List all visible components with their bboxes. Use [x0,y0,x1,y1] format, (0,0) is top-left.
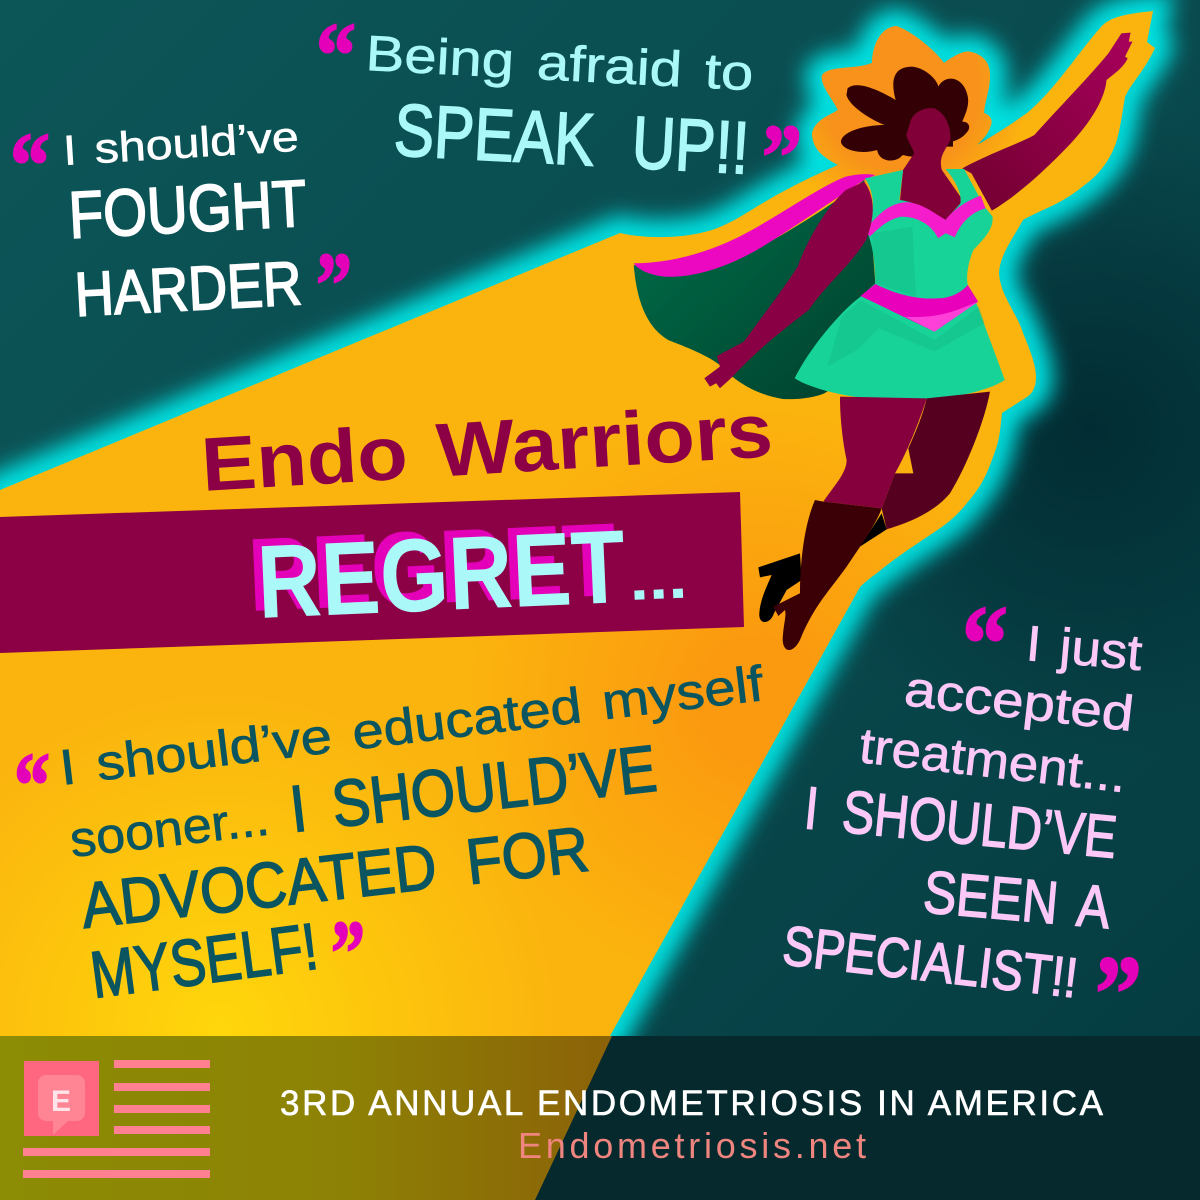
dress [795,169,1005,400]
neckline [865,196,986,238]
quote: fought harder: FOUGHT [67,166,308,252]
quote: being afraid to speak up: SPEAK UP!! [392,88,751,190]
regret shadow: REGRET [246,502,619,634]
quote: fought harder: ” [316,234,352,336]
footer site name: Endometriosis.net [518,1125,866,1166]
figure: upper body [634,33,1132,400]
quote: educated and advocated: I should’ve educated myself [57,655,766,796]
quote: seen a specialist [780,585,1145,1054]
quote: being afraid to speak up: ” [762,106,802,208]
quote: seen a specialist: treatment... [857,717,1129,803]
logo: endometriosis.net flag: E [51,1085,71,1118]
raised arm [962,33,1132,211]
lowered arm [704,182,873,388]
quote: educated and advocated: sooner... [67,790,272,868]
quote: fought harder: I should’ve [62,113,300,174]
quote: seen a specialist: “ [962,585,1008,704]
footer band [0,1036,1200,1200]
quote: fought harder [10,113,352,336]
footer title: 3RD ANNUAL ENDOMETRIOSIS IN AMERICA [280,1084,1104,1123]
quote: seen a specialist: SPECIALIST!! [780,913,1081,1009]
superhero figure [634,33,1132,650]
quote: educated and advocated: MYSELF! [86,909,322,1012]
quote: seen a specialist: accepted [902,660,1137,742]
belt tip [905,302,978,332]
quote: educated and advocated [14,655,766,1012]
quote: educated and advocated: I SHOULD’VE [286,731,660,846]
hair [841,67,969,161]
belt [860,284,978,332]
quote: being afraid to speak up [316,4,802,208]
logo: endometriosis.net flag [23,1060,210,1178]
quote: seen a specialist: ” [1095,935,1142,1054]
quote: seen a specialist: I SHOULD’VE [802,774,1120,871]
cape lining [634,174,875,277]
heading: endo warriors: Endo Warriors [199,388,775,508]
quote: being afraid to speak up: “ [316,4,356,106]
back leg [882,392,990,529]
face and chest [899,108,962,222]
front leg [823,397,927,508]
dress shading [827,227,984,367]
figure: legs and boots [758,392,990,650]
back boot [860,513,887,547]
quote: educated and advocated: ” [331,902,365,1004]
banner: regret: ... [628,543,689,614]
front boot [773,500,882,650]
quote: educated and advocated: ADVOCATED FOR [77,813,592,942]
quote: fought harder: HARDER [73,249,303,330]
banner: regret: REGRET [255,509,628,641]
quote: seen a specialist: I just [1024,615,1145,681]
quote: seen a specialist: SEEN A [921,858,1113,941]
boot heel [758,553,802,622]
cape [634,180,875,399]
banner: regret [0,492,744,653]
quote: being afraid to speak up: Being afraid to [364,25,755,101]
quote: fought harder: “ [10,114,50,216]
quote: educated and advocated: “ [14,734,50,836]
